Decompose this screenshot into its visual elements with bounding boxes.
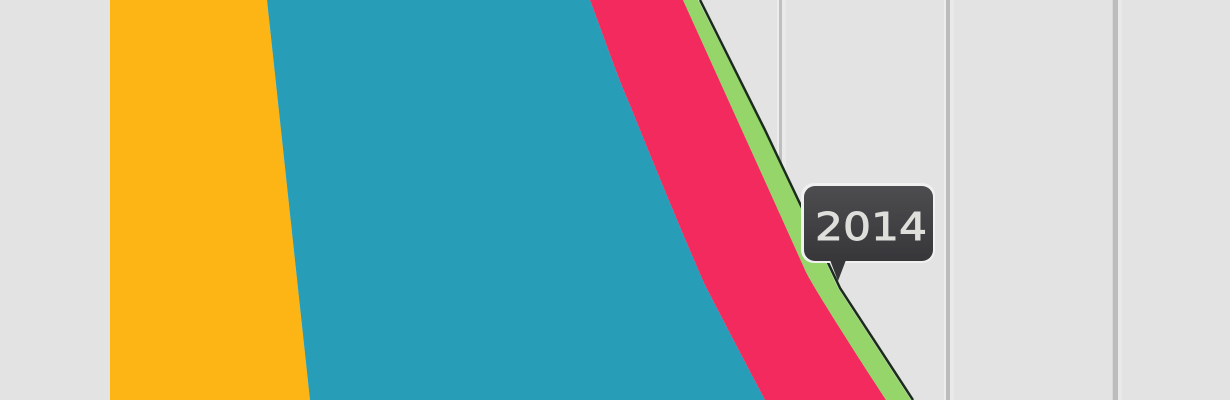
area: green series [683, 0, 911, 400]
area: teal series [267, 0, 765, 400]
tooltip: 2014 [801, 183, 935, 281]
area: yellow series [110, 0, 310, 400]
tooltip label: 2014 [815, 205, 927, 249]
area: red series [590, 0, 886, 400]
chart outline: top edge line [700, 0, 913, 400]
